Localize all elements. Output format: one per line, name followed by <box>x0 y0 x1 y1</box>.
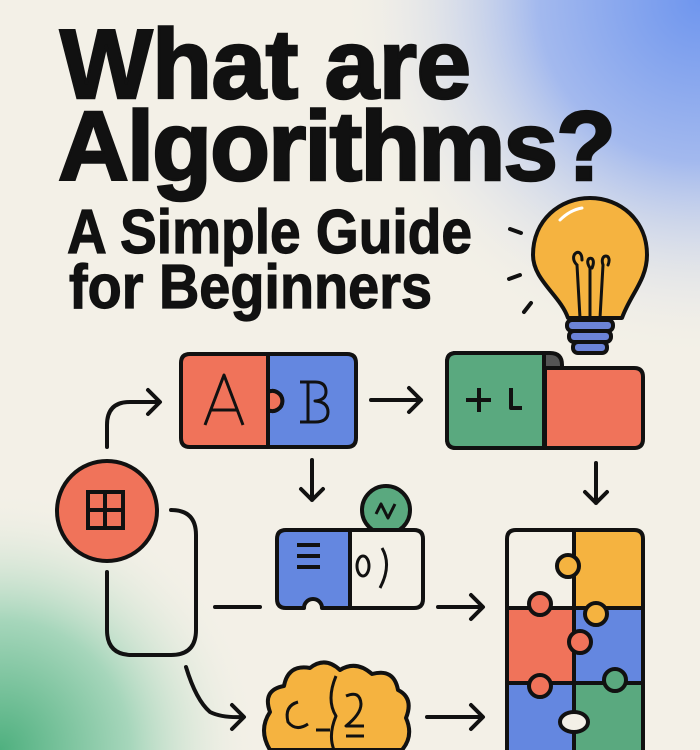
arrow: A-B to green box <box>371 388 421 412</box>
title <box>58 9 613 201</box>
panel: middle document puzzle <box>277 486 423 608</box>
arrow: down from A-B <box>301 460 323 500</box>
title: Algorithms? <box>58 91 613 201</box>
arrow: middle to puzzle column <box>438 595 483 619</box>
panel: puzzle column <box>507 530 643 750</box>
arrow: down from green box <box>585 463 607 503</box>
arrow: brain to puzzle column <box>427 705 483 729</box>
arrow: loop to brain <box>186 667 244 729</box>
panel: A-B puzzle <box>181 354 356 447</box>
title: What are <box>60 9 468 119</box>
subtitle: for Beginners <box>69 253 432 322</box>
subtitle: A Simple Guide <box>67 198 472 267</box>
arrow: circle to A-B <box>107 390 160 447</box>
connector loop <box>107 510 196 655</box>
line: loop to middle <box>215 605 260 609</box>
icon: grid circle <box>57 461 157 561</box>
icon: lightbulb <box>509 198 647 353</box>
panel: green-red box <box>447 353 643 448</box>
icon: brain <box>264 662 409 750</box>
subtitle <box>67 198 472 322</box>
